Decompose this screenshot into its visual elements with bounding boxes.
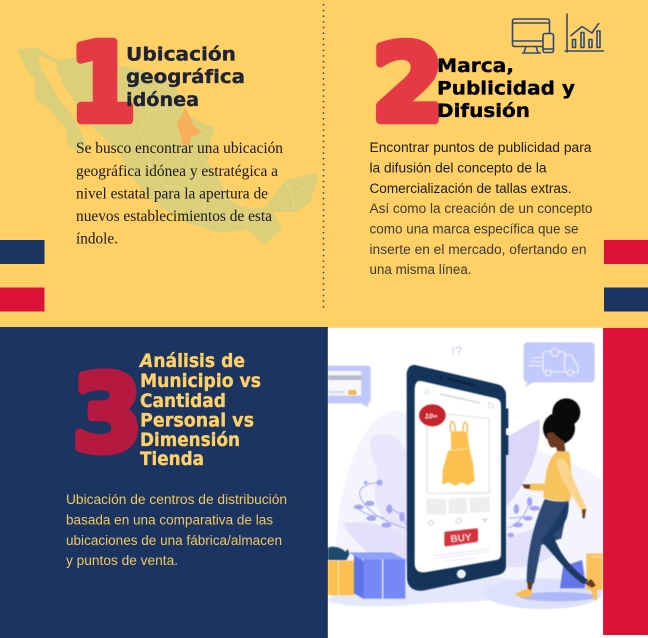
woman: [515, 398, 597, 600]
buy button: [444, 528, 478, 546]
sprig leaves: [354, 480, 540, 537]
text block 2: Comercialización de tallas extras.: [370, 181, 572, 196]
number 3: 3: [72, 354, 142, 475]
heading 2: [437, 55, 576, 122]
text block 3: y puntos de venta.: [66, 553, 178, 568]
heading 3: [138, 350, 261, 470]
text block 3: [66, 492, 287, 568]
text block 2: la difusión del concepto de la: [370, 160, 547, 176]
panel: ubicación geográfica: [0, 21, 318, 312]
question marks: !?: [451, 344, 463, 359]
text block 3: basada en una comparativa de las: [66, 512, 273, 528]
heading 2: Difusión: [437, 100, 530, 122]
speech bubble: truck: [524, 342, 595, 387]
number 2: 2: [372, 22, 444, 145]
text block 2: inserte en el mercado, ofertando en: [370, 242, 586, 257]
text block 1: Se busco encontrar una ubicación: [76, 140, 283, 157]
number 1: 1: [70, 21, 136, 145]
buy button: BUY: [450, 532, 472, 545]
text block 2: [370, 140, 592, 277]
action icons: [428, 518, 487, 525]
yellow background: [0, 0, 648, 328]
heading 1: Ubicación: [126, 44, 236, 66]
icon: computer and phone: [512, 19, 554, 53]
ground shadows: [328, 578, 602, 609]
heading 2: Publicidad y: [437, 78, 576, 100]
text block 1: nuevos establecimientos de esta: [76, 208, 272, 225]
left side bars: [0, 240, 44, 312]
panel: marca y publicidad: [370, 14, 648, 312]
price tag: [419, 404, 446, 426]
heading 3: Dimensión: [140, 429, 240, 451]
illustration: online shopping: [328, 328, 603, 638]
red side panel: [603, 328, 648, 635]
navy background: [0, 327, 328, 638]
price tag: 10: [425, 412, 433, 421]
right side bars: [604, 240, 648, 312]
phone: [407, 365, 508, 591]
boxes: [328, 547, 405, 599]
map of Mexico: [17, 48, 318, 245]
heading 3: Cantidad: [140, 390, 226, 412]
heading 3: Tienda: [140, 448, 204, 470]
panel: análisis de municipio: [0, 327, 328, 638]
heading 1: geográfica: [126, 66, 245, 88]
sprigs: [356, 483, 530, 528]
speech bubble: credit card: [328, 366, 371, 408]
heading 3: Personal vs: [140, 410, 254, 432]
heading 2: Marca,: [437, 55, 514, 77]
heading 3: Municipio vs: [140, 370, 261, 392]
icon: bar and line chart: [564, 14, 604, 52]
text block 2: como una marca específica que se: [370, 222, 578, 236]
heading 3: Análisis de: [138, 350, 245, 372]
shopping bags: [560, 553, 603, 590]
price tag: 99: [433, 414, 438, 419]
text block 1: geográfica idónea y estratégica a: [76, 163, 278, 180]
text block 1: índole.: [76, 230, 118, 248]
text block 1: [76, 140, 283, 248]
dress: [442, 422, 475, 486]
heading 1: idónea: [126, 89, 199, 111]
text block 1: nivel estatal para la apertura de: [76, 186, 268, 202]
text block 3: Ubicación de centros de distribución: [66, 492, 287, 507]
pale background shapes: [336, 411, 603, 592]
text block 3: ubicaciones de una fábrica/almacen: [66, 533, 282, 548]
text block 2: Así como la creación de un concepto: [370, 201, 592, 216]
text block 2: Encontrar puntos de publicidad para: [370, 140, 592, 155]
heading 1: [126, 44, 245, 111]
text block 2: una misma línea.: [370, 262, 472, 277]
thumbnails: [426, 497, 490, 514]
